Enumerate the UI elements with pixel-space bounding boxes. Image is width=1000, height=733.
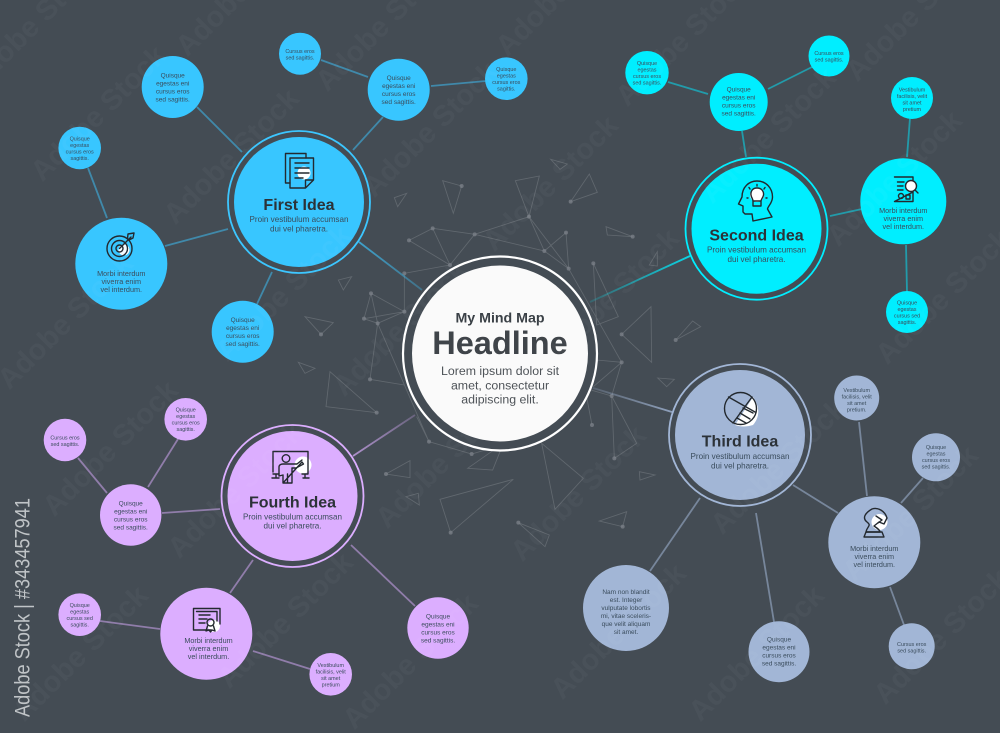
watermark pattern: Adobe Stock <box>370 386 518 535</box>
node: third quisque bottom: sed sagittis. <box>762 660 796 668</box>
watermark pattern: Adobe Stock <box>327 254 475 403</box>
central headline circle: amet, consectetur <box>451 378 549 392</box>
node: fourth quisque left: Quisque <box>119 500 143 508</box>
third idea connectors <box>593 388 923 625</box>
node: fourth top small: egestas <box>176 414 196 420</box>
node: first far left: sagittis. <box>70 156 89 162</box>
watermark pattern: Adobe Stock <box>705 392 853 541</box>
node: fourth quisque left: egestas eni <box>114 508 147 516</box>
node: first quisque left: cursus eros <box>156 88 190 95</box>
node: third vestibulum: sit amet <box>847 401 867 407</box>
fourth idea main circle: dui vel pharetra. <box>263 522 322 531</box>
node: fourth left small <box>58 593 101 636</box>
node: first far right: egestas <box>497 74 516 80</box>
node: second bottom small: Quisque <box>897 300 917 306</box>
node: fourth vestibulum <box>309 653 352 696</box>
third idea main circle: Third Idea <box>702 434 778 451</box>
node: fourth morbi: vel interdum. <box>188 652 229 661</box>
node: second left small: egestas <box>637 68 657 74</box>
node: first far right: cursus eros <box>492 80 521 86</box>
node: fourth cursus: sed sagittis. <box>51 442 80 448</box>
node: third quisque bottom: Quisque <box>767 636 791 644</box>
watermark pattern: Adobe Stock <box>545 557 693 706</box>
node: second left small: Quisque <box>637 61 657 67</box>
node: fourth top small: Quisque <box>176 408 196 414</box>
node: fourth top small: cursus eros <box>172 420 200 426</box>
node: third morbi: Morbi interdum <box>850 544 898 553</box>
watermark pattern: Adobe Stock <box>821 104 969 253</box>
central headline circle: Lorem ipsum dolor sit <box>441 364 560 378</box>
node: second vestibulum: sit amet <box>902 100 922 106</box>
watermark pattern: Adobe Stock <box>683 579 831 728</box>
node: first quisque right: egestas eni <box>382 83 415 90</box>
watermark pattern: Adobe Stock <box>210 219 358 368</box>
watermark pattern: Adobe Stock <box>837 439 985 588</box>
node: first morbi: Morbi interdum <box>97 269 145 278</box>
node: first far left: Quisque <box>70 136 90 142</box>
node: third right small: cursus eros <box>922 458 950 464</box>
node: second bottom small: cursus sed <box>894 314 920 320</box>
node: third nam non blandit <box>583 565 669 651</box>
node: third cursus: sed sagittis. <box>897 648 927 654</box>
watermark pattern: Adobe Stock <box>357 55 505 204</box>
third idea main circle: Proin vestibulum accumsan <box>691 452 789 461</box>
node: first far right: sagittis. <box>497 86 516 92</box>
third idea main circle <box>669 364 811 506</box>
node: fourth cursus: Cursus eros <box>50 436 80 442</box>
node: fourth quisque right: sed sagittis. <box>421 638 455 644</box>
stock id vertical label: Adobe Stock | #343457941 <box>12 498 34 717</box>
icon: head with light bulb <box>738 181 772 221</box>
watermark pattern: Adobe Stock <box>212 546 360 695</box>
node: second quisque top: Quisque <box>727 86 751 94</box>
watermark pattern: Adobe Stock <box>162 416 310 565</box>
node: first morbi: viverra enim <box>102 277 141 286</box>
central headline circle: Headline <box>432 325 568 361</box>
node: fourth vestibulum: pretium <box>322 682 340 688</box>
node: fourth morbi: Morbi interdum <box>184 636 233 645</box>
node: third right small <box>912 433 960 481</box>
watermark pattern: Adobe Stock <box>477 109 625 258</box>
second idea connectors <box>590 67 910 302</box>
node: first quisque right: sed sagittis. <box>382 99 416 106</box>
node: fourth top small: sagittis. <box>176 427 195 433</box>
node: second morbi <box>860 158 946 244</box>
node: fourth quisque left: cursus eros <box>114 516 148 524</box>
central headline circle: My Mind Map <box>455 311 545 327</box>
second idea main circle: Proin vestibulum accumsan <box>707 246 806 255</box>
node: third nam non blandit: que velit aliquam <box>602 621 650 628</box>
node: fourth left small: egestas <box>70 610 90 616</box>
fourth idea main circle <box>222 425 364 567</box>
node: second bottom small: sagittis. <box>898 320 917 326</box>
node: fourth cursus <box>44 419 86 461</box>
node: second vestibulum: facilisis, velit <box>897 94 928 100</box>
node: fourth left small: Quisque <box>70 603 90 609</box>
node: third morbi <box>828 496 920 588</box>
node: first morbi <box>75 218 167 310</box>
node: fourth vestibulum: Vestibulum <box>317 663 344 669</box>
node: second quisque top: cursus eros <box>722 102 756 110</box>
node: second vestibulum: pretium <box>903 107 922 113</box>
node: third nam non blandit: Nam non blandit <box>602 589 650 596</box>
watermark pattern: Adobe Stock <box>7 579 155 728</box>
node: fourth quisque right: cursus eros <box>421 630 456 636</box>
node: second quisque top: egestas eni <box>722 94 755 102</box>
icon: report with magnifier <box>894 177 918 202</box>
node: first cursus: Cursus eros <box>285 49 315 55</box>
node: fourth quisque left: sed sagittis. <box>114 524 148 532</box>
second idea main circle: Second Idea <box>709 228 804 245</box>
node: third cursus <box>889 623 935 669</box>
node: first bottom <box>212 301 274 363</box>
node: third vestibulum <box>834 376 879 420</box>
node: second top right small: Cursus eros <box>814 51 844 57</box>
fourth idea main circle: Fourth Idea <box>249 494 336 511</box>
network of triangles background <box>298 159 701 547</box>
first idea main circle: First Idea <box>263 197 335 214</box>
node: third nam non blandit: mi, vitae sceleris- <box>601 613 651 620</box>
node: fourth quisque right: Quisque <box>426 614 450 620</box>
node: first bottom: egestas eni <box>226 325 259 332</box>
node: third quisque bottom: cursus eros <box>762 652 797 660</box>
first idea main circle: dui vel pharetra. <box>270 224 328 234</box>
node: second top right small <box>808 36 850 76</box>
node: third morbi: vel interdum. <box>854 560 895 569</box>
node: first quisque left: sed sagittis. <box>156 96 190 103</box>
node: fourth morbi: viverra enim <box>189 644 228 653</box>
node: first far left: egestas <box>70 143 90 149</box>
node: first quisque left: Quisque <box>161 72 185 79</box>
watermark pattern: Adobe Stock <box>25 39 173 188</box>
watermark pattern: Adobe Stock <box>37 374 185 523</box>
node: third nam non blandit: vulputate lobortis <box>601 605 651 612</box>
node: fourth vestibulum: sit amet <box>321 676 341 682</box>
node: fourth morbi <box>160 588 252 680</box>
node: third quisque bottom: egestas eni <box>762 644 796 652</box>
node: fourth top small <box>164 398 207 441</box>
node: first bottom: Quisque <box>231 317 255 324</box>
icon: chess knight <box>864 508 888 537</box>
fourth idea connectors <box>78 415 415 669</box>
node: fourth quisque left <box>100 484 161 546</box>
central headline circle: adipiscing elit. <box>461 393 539 407</box>
node: third right small: egestas <box>926 452 946 458</box>
node: third quisque bottom <box>748 621 810 682</box>
node: first quisque left <box>142 56 204 118</box>
first idea main circle <box>228 131 370 273</box>
node: third morbi: viverra enim <box>855 552 894 561</box>
node: first quisque left: egestas eni <box>156 80 189 87</box>
watermark pattern: Adobe Stock <box>695 61 843 210</box>
node: second left small <box>625 51 669 94</box>
node: second vestibulum <box>891 77 933 119</box>
node: first bottom: sed sagittis. <box>226 341 260 348</box>
node: first cursus <box>279 33 321 75</box>
node: second bottom small <box>886 291 928 333</box>
node: first quisque right: cursus eros <box>382 91 416 98</box>
first idea connectors <box>88 60 486 304</box>
watermark pattern: Adobe Stock <box>337 587 485 733</box>
node: first quisque right <box>368 59 430 121</box>
node: first far left <box>58 127 101 169</box>
fourth idea main circle: Proin vestibulum accumsan <box>243 512 342 521</box>
node: first morbi: vel interdum. <box>101 285 142 294</box>
node: second bottom small: egestas <box>897 307 917 313</box>
node: first far right <box>485 57 528 100</box>
node: second left small: sed sagittis. <box>633 80 662 86</box>
node: second vestibulum: Vestibulum <box>899 88 926 94</box>
node: second morbi: vel interdum. <box>883 222 924 231</box>
panel: fourth idea <box>44 398 469 696</box>
node: second left small: cursus eros <box>633 74 661 80</box>
watermark pattern: Adobe Stock <box>158 82 306 231</box>
node: second morbi: viverra enim <box>884 214 923 223</box>
panel: second idea <box>590 36 946 333</box>
node: third vestibulum: facilisis, velit <box>842 394 872 400</box>
icon: presenter at board <box>272 452 312 483</box>
node: first cursus: sed sagittis. <box>286 56 315 62</box>
node: third nam non blandit: est. Integer <box>610 597 643 604</box>
node: second morbi: Morbi interdum <box>879 206 927 215</box>
icon: pie chart <box>724 392 758 426</box>
node: first far right: Quisque <box>496 67 516 73</box>
node: third right small: sed sagittis. <box>922 464 951 470</box>
second idea main circle <box>686 158 828 300</box>
node: fourth quisque right <box>407 597 469 659</box>
node: third nam non blandit: sit amet. <box>614 629 638 636</box>
central headline circle <box>403 256 597 450</box>
watermark pattern: Adobe Stock <box>505 419 653 568</box>
node: first quisque right: Quisque <box>387 75 411 82</box>
first idea main circle: Proin vestibulum accumsan <box>250 215 348 224</box>
node: third vestibulum: pretium. <box>847 408 867 414</box>
node: second top right small: sed sagittis. <box>815 58 844 64</box>
node: second quisque top <box>710 73 768 131</box>
node: third right small: Quisque <box>926 445 946 451</box>
node: third cursus: Cursus eros <box>897 642 927 648</box>
node: first bottom: cursus eros <box>226 333 260 340</box>
panel: first idea <box>58 33 528 363</box>
node: fourth quisque right: egestas eni <box>421 622 455 628</box>
icon: target <box>107 233 134 261</box>
third idea main circle: dui vel pharetra. <box>711 461 769 470</box>
node: third vestibulum: Vestibulum <box>843 388 870 394</box>
icon: documents <box>286 154 314 188</box>
panel: third idea <box>583 364 960 682</box>
second idea main circle: dui vel pharetra. <box>727 255 786 264</box>
node: second quisque top: sed sagittis. <box>722 110 756 118</box>
node: first far left: cursus eros <box>66 150 94 156</box>
icon: certificate <box>194 608 220 632</box>
node: fourth vestibulum: facilisis, velit <box>316 670 346 676</box>
node: fourth left small: sagittis. <box>70 622 89 628</box>
watermark pattern: Adobe Stock <box>538 222 686 371</box>
node: fourth left small: cursus sed <box>67 616 93 622</box>
